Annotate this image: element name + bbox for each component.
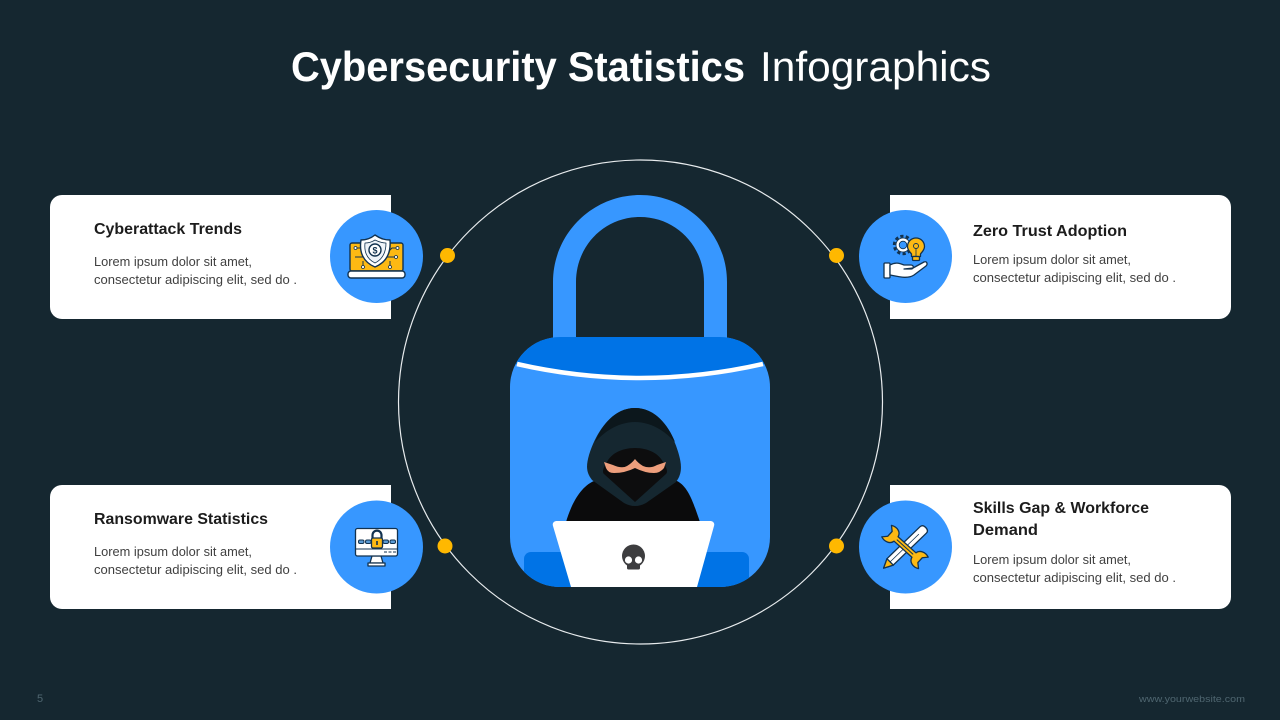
- padlock body: [510, 337, 770, 587]
- panel: Cyberattack Trends: [50, 195, 423, 319]
- padlock shackle: [553, 195, 727, 340]
- laptop: [553, 521, 714, 587]
- text block: consectetur adipiscing elit, sed do .: [973, 570, 1176, 585]
- text block: [94, 544, 297, 577]
- text block: consectetur adipiscing elit, sed do .: [94, 272, 297, 287]
- icon: monitor with lock: [356, 528, 398, 566]
- title: Infographics: [760, 43, 991, 90]
- icon circle: [330, 210, 423, 303]
- heading: Ransomware Statistics: [94, 511, 268, 528]
- text block: Lorem ipsum dolor sit amet,: [94, 254, 252, 269]
- pencil: [881, 524, 929, 571]
- page number: 5: [37, 693, 43, 705]
- text block: [94, 254, 297, 287]
- icon: laptop with shield: $: [372, 246, 378, 256]
- text block: Lorem ipsum dolor sit amet,: [973, 552, 1131, 567]
- heading: Skills Gap & Workforce: [973, 500, 1149, 517]
- central padlock illustration: [510, 195, 770, 587]
- panel: Ransomware Statistics: [50, 485, 423, 609]
- title: [291, 43, 991, 90]
- text block: consectetur adipiscing elit, sed do .: [94, 562, 297, 577]
- heading: Cyberattack Trends: [94, 221, 242, 238]
- text block: [973, 252, 1176, 285]
- icon circle: [859, 500, 952, 594]
- wrench: [881, 524, 929, 570]
- padlock top band: [516, 337, 764, 587]
- icon: laptop with shield: [348, 235, 405, 278]
- title: Cybersecurity Statistics: [291, 43, 745, 90]
- icon: wrench and pencil: [881, 524, 929, 571]
- heading: Zero Trust Adoption: [973, 223, 1127, 240]
- hacker figure: [566, 408, 700, 522]
- text block: Lorem ipsum dolor sit amet,: [973, 252, 1131, 267]
- heading: Demand: [973, 522, 1038, 539]
- text block: [973, 552, 1176, 585]
- text block: Lorem ipsum dolor sit amet,: [94, 544, 252, 559]
- panel: Zero Trust Adoption: [859, 195, 1231, 319]
- text block: consectetur adipiscing elit, sed do .: [973, 270, 1176, 285]
- large outline circle: [398, 160, 882, 644]
- heading: [973, 500, 1149, 539]
- website: www.yourwebsite.com: [1138, 694, 1245, 705]
- icon circle: [859, 210, 952, 303]
- icon: hand with gear and bulb: [884, 236, 927, 278]
- panel: Skills Gap & Workforce Demand: [859, 485, 1231, 609]
- icon circle: [330, 500, 423, 594]
- skull logo: [622, 544, 645, 570]
- connector dots: [438, 248, 844, 554]
